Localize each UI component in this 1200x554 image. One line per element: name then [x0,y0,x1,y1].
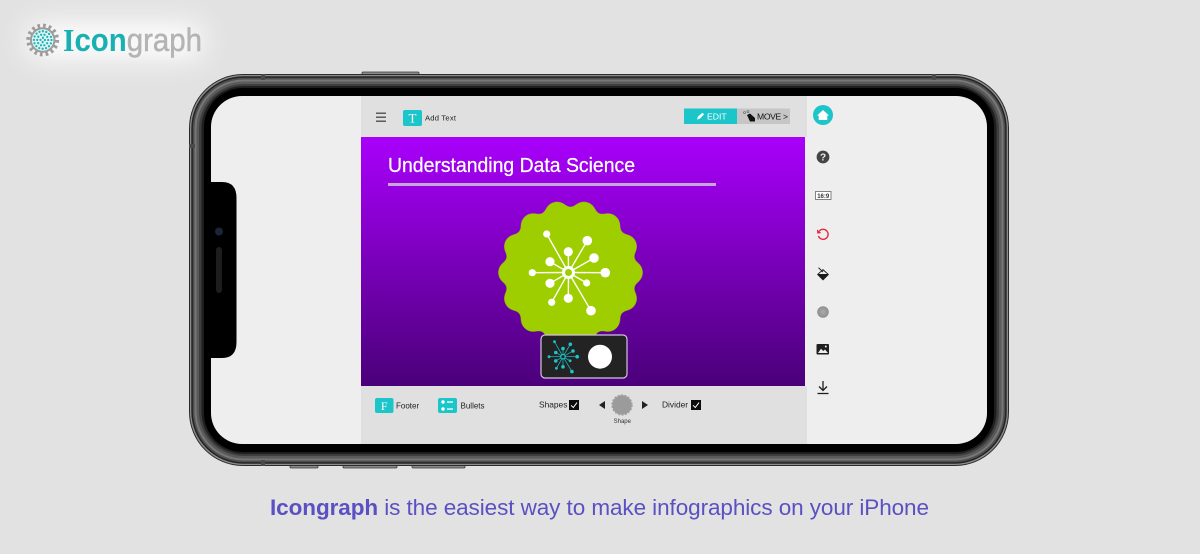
logo: Icongraph [26,22,204,60]
logo wordmark: Icongraph [63,22,202,58]
footer: divider checkbox: Divider [662,400,688,410]
sidebar: colour dot [817,306,829,318]
icon: pencil [697,113,704,120]
toolbar: edit and move toggle: EDIT [707,112,727,122]
footer: footer button [375,398,419,413]
sidebar: aspect ratio 16:9 [816,192,831,200]
footer: footer button: Footer [396,402,419,410]
title: Understanding Data Science: Understanding Data Science [388,154,635,177]
icon: hand pointer [744,110,755,122]
footer: shape selector [599,395,648,425]
screen [211,96,987,444]
scalloped green badge [498,202,643,344]
toolbar: hamburger menu [376,113,386,121]
toolbar: add text button [403,110,457,126]
sidebar: undo icon [817,229,828,239]
icon and colour picker popup [541,335,627,378]
sidebar: aspect ratio 16:9: 16:9 [817,194,830,200]
sidebar: home button [813,105,833,125]
app toolbar background [361,96,807,137]
footer: shapes checkbox: Shapes [539,400,567,410]
caption: Icongraph is the easiest way to make infographics on your iPhone [270,495,929,520]
sidebar: download icon [818,381,828,394]
toolbar: add text button: T [409,110,417,126]
phone side buttons [290,72,465,468]
toolbar: add text button: Add Text [425,114,457,122]
footer: shape selector: Shape [614,419,632,425]
sidebar: fill bucket icon [817,268,829,280]
sidebar: help button: ? [820,152,826,164]
footer: bullets button [438,398,485,413]
icon: data network (white) [529,230,610,316]
app footer background [361,386,807,444]
speaker [216,247,222,293]
footer: footer button: F [381,399,388,413]
icon: mini data network (teal) [548,340,579,373]
notch [204,178,236,362]
footer: bullets button: Bullets [460,402,485,410]
footer: divider checkbox [662,400,701,410]
icon: logo sunburst [28,26,57,54]
sidebar: image icon [816,344,829,354]
footer: shapes checkbox [539,400,579,410]
icon: front camera [215,228,223,236]
colour swatch: white [588,345,612,369]
toolbar: edit and move toggle: MOVE > [757,112,788,122]
title underline [388,183,716,186]
toolbar: edit and move toggle [684,108,790,124]
phone frame [189,72,1009,468]
canvas: purple slide [361,137,805,386]
sidebar: help button [817,151,829,164]
antenna seams [189,74,936,466]
